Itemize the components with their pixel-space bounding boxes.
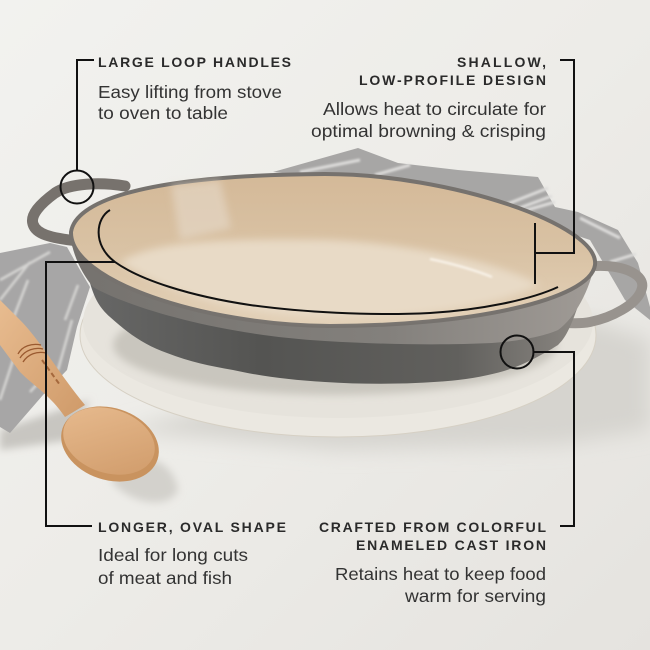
body text: of meat and fish bbox=[98, 568, 232, 588]
body text: Retains heat to keep food bbox=[335, 564, 546, 584]
callout: enameled cast iron bbox=[319, 336, 574, 606]
heading: LOW-PROFILE DESIGN bbox=[359, 72, 546, 88]
callout: longer oval shape bbox=[46, 210, 558, 588]
leader line bbox=[60, 60, 94, 204]
callout: large loop handles bbox=[60, 54, 291, 204]
highlights bbox=[171, 180, 231, 240]
leader line bbox=[46, 210, 558, 526]
body text bbox=[98, 545, 248, 588]
scene: dish on marble with towel and spoon bbox=[0, 148, 650, 502]
heading bbox=[359, 54, 546, 88]
heading: CRAFTED FROM COLORFUL bbox=[319, 519, 546, 535]
leader line bbox=[500, 336, 574, 526]
heading: SHALLOW, bbox=[457, 54, 546, 70]
body text bbox=[98, 82, 282, 123]
body text: Easy lifting from stove bbox=[98, 82, 282, 102]
body text: to oven to table bbox=[98, 103, 228, 123]
body text: Ideal for long cuts bbox=[98, 545, 248, 565]
left handle bbox=[32, 184, 125, 241]
body text bbox=[335, 564, 546, 606]
body text: optimal browning & crisping bbox=[311, 121, 546, 141]
shadow on marble bbox=[113, 295, 557, 395]
dish base bbox=[120, 240, 540, 318]
dish interior with rim bbox=[71, 174, 595, 326]
spoon bbox=[0, 300, 169, 494]
heading: ENAMELED CAST IRON bbox=[356, 537, 546, 553]
right handle bbox=[530, 266, 642, 323]
towel: back bbox=[273, 148, 650, 320]
body text: warm for serving bbox=[404, 586, 546, 606]
heading bbox=[319, 519, 546, 553]
body text: Allows heat to circulate for bbox=[323, 99, 546, 119]
leader line bbox=[535, 60, 574, 284]
dish body bbox=[90, 283, 580, 384]
callout: shallow low-profile design bbox=[311, 54, 574, 284]
towel: left bbox=[0, 243, 90, 433]
heading: LONGER, OVAL SHAPE bbox=[98, 519, 286, 535]
body text bbox=[311, 99, 546, 141]
floor shadows bbox=[120, 320, 650, 450]
heading: LARGE LOOP HANDLES bbox=[98, 54, 291, 70]
rim band bbox=[72, 245, 595, 344]
marble board bbox=[80, 226, 596, 437]
